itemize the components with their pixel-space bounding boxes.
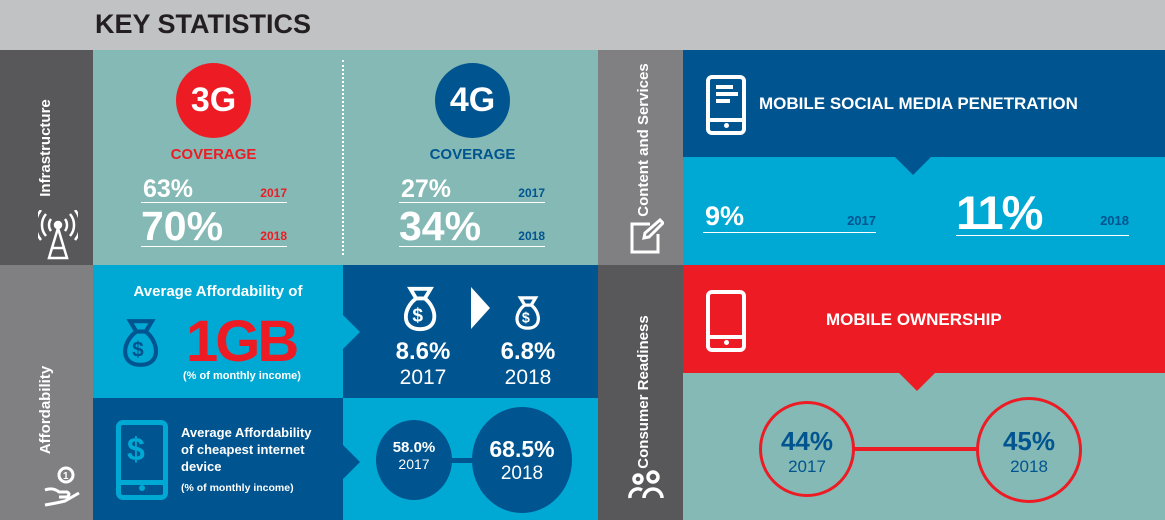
3G 2017: 63% <box>143 175 193 203</box>
arrow notch <box>343 315 360 349</box>
circle 2017 <box>376 420 452 500</box>
sidebar: content and services <box>598 50 683 265</box>
value 2018 <box>501 338 555 389</box>
heading: MOBILE SOCIAL MEDIA PENETRATION <box>759 94 1078 113</box>
icon: edit <box>630 218 664 254</box>
4G 2018: 34% <box>399 203 481 249</box>
3G coverage label: COVERAGE <box>171 146 256 163</box>
icon: phone text <box>706 75 746 135</box>
value 2018: 2018 <box>505 366 551 389</box>
circle 44%: 44% <box>781 426 833 456</box>
subnote: (% of monthly income) <box>181 482 294 494</box>
icon: 4G circle <box>435 63 510 138</box>
icon: money bag 2017: $ <box>412 305 423 326</box>
icon: money bag <box>123 319 158 367</box>
heading: device <box>181 459 221 474</box>
2018 value <box>956 185 1129 236</box>
icon: money bag 2017 <box>404 286 436 332</box>
sidebar: affordability <box>0 265 93 520</box>
arrow <box>471 287 490 329</box>
icon: money bag: $ <box>132 339 144 362</box>
connector <box>443 458 483 463</box>
2018 value: 2018 <box>1100 213 1129 228</box>
panel: device values <box>343 398 598 520</box>
value 2017 <box>396 338 450 389</box>
icon: hand coin: 1 <box>63 471 69 482</box>
circle 2018: 2018 <box>501 463 543 484</box>
heading: MOBILE OWNERSHIP <box>826 310 1002 329</box>
panel: infrastructure <box>93 50 598 265</box>
sidebar: infrastructure <box>0 50 93 265</box>
3G 2018: 70% <box>141 203 223 249</box>
divider dotted <box>342 60 344 255</box>
3G 2017 <box>141 174 287 203</box>
icon: antenna <box>38 210 78 260</box>
2017 value: 9% <box>705 201 744 231</box>
sidebar: consumer readiness <box>598 265 683 520</box>
circle 2018 <box>472 407 572 513</box>
circle 44% <box>759 401 855 497</box>
label affordability: Affordability <box>37 366 54 454</box>
icon: phone <box>706 290 746 352</box>
2018 value: 11% <box>956 186 1041 239</box>
panel: 1GB values <box>343 265 598 398</box>
notch <box>899 373 935 391</box>
3G 2018 <box>141 203 287 247</box>
panel: mobile ownership heading <box>683 265 1165 373</box>
1GB: 1GB <box>186 309 296 374</box>
panel: mobile ownership values <box>683 373 1165 520</box>
circle 2017: 2017 <box>398 456 430 472</box>
icon: hand coin <box>44 466 80 506</box>
label infrastructure: Infrastructure <box>37 99 54 197</box>
value 2017: 2017 <box>400 366 446 389</box>
icon: 3G circle: 3G <box>191 81 236 119</box>
4G coverage label: COVERAGE <box>430 146 515 163</box>
panel: social media values <box>683 157 1165 265</box>
2017 value <box>703 199 876 233</box>
4G 2017: 27% <box>401 175 451 203</box>
panel: 1GB affordability <box>93 265 343 398</box>
header band <box>0 0 1165 50</box>
value 2018: 6.8% <box>501 338 555 365</box>
3G 2018: 2018 <box>260 229 287 243</box>
4G 2018 <box>399 203 545 247</box>
panel: social media heading <box>683 50 1165 157</box>
icon: money bag 2018 <box>515 296 540 330</box>
icon: 4G circle: 4G <box>450 81 495 119</box>
icon: phone dollar <box>116 420 168 500</box>
heading: Average Affordability <box>181 425 312 440</box>
heading: Average Affordability of <box>134 283 302 300</box>
connector <box>853 447 978 451</box>
4G 2018: 2018 <box>518 229 545 243</box>
icon: phone dollar: $ <box>127 431 145 467</box>
4G 2017: 2017 <box>518 186 545 200</box>
title: KEY STATISTICS <box>95 9 311 39</box>
panel: device affordability <box>93 398 343 520</box>
circle 2018: 68.5% <box>489 436 555 462</box>
circle 45% <box>976 397 1082 503</box>
circle 45%: 2018 <box>1010 457 1048 476</box>
value 2017: 8.6% <box>396 338 450 365</box>
heading: of cheapest internet <box>181 442 305 457</box>
label consumer: Consumer Readiness <box>635 315 652 469</box>
subnote: (% of monthly income) <box>183 370 301 382</box>
icon: people <box>628 470 664 498</box>
4G 2017 <box>399 174 545 203</box>
circle 45%: 45% <box>1003 426 1055 456</box>
icon: money bag 2018: $ <box>522 310 530 326</box>
circle 44%: 2017 <box>788 457 826 476</box>
2017 value: 2017 <box>847 213 876 228</box>
notch <box>895 157 931 175</box>
arrow notch <box>343 445 360 479</box>
heading <box>181 425 312 474</box>
icon: 3G circle <box>176 63 251 138</box>
circle 2017: 58.0% <box>393 439 435 456</box>
3G 2017: 2017 <box>260 186 287 200</box>
label content: Content and Services <box>635 63 652 217</box>
